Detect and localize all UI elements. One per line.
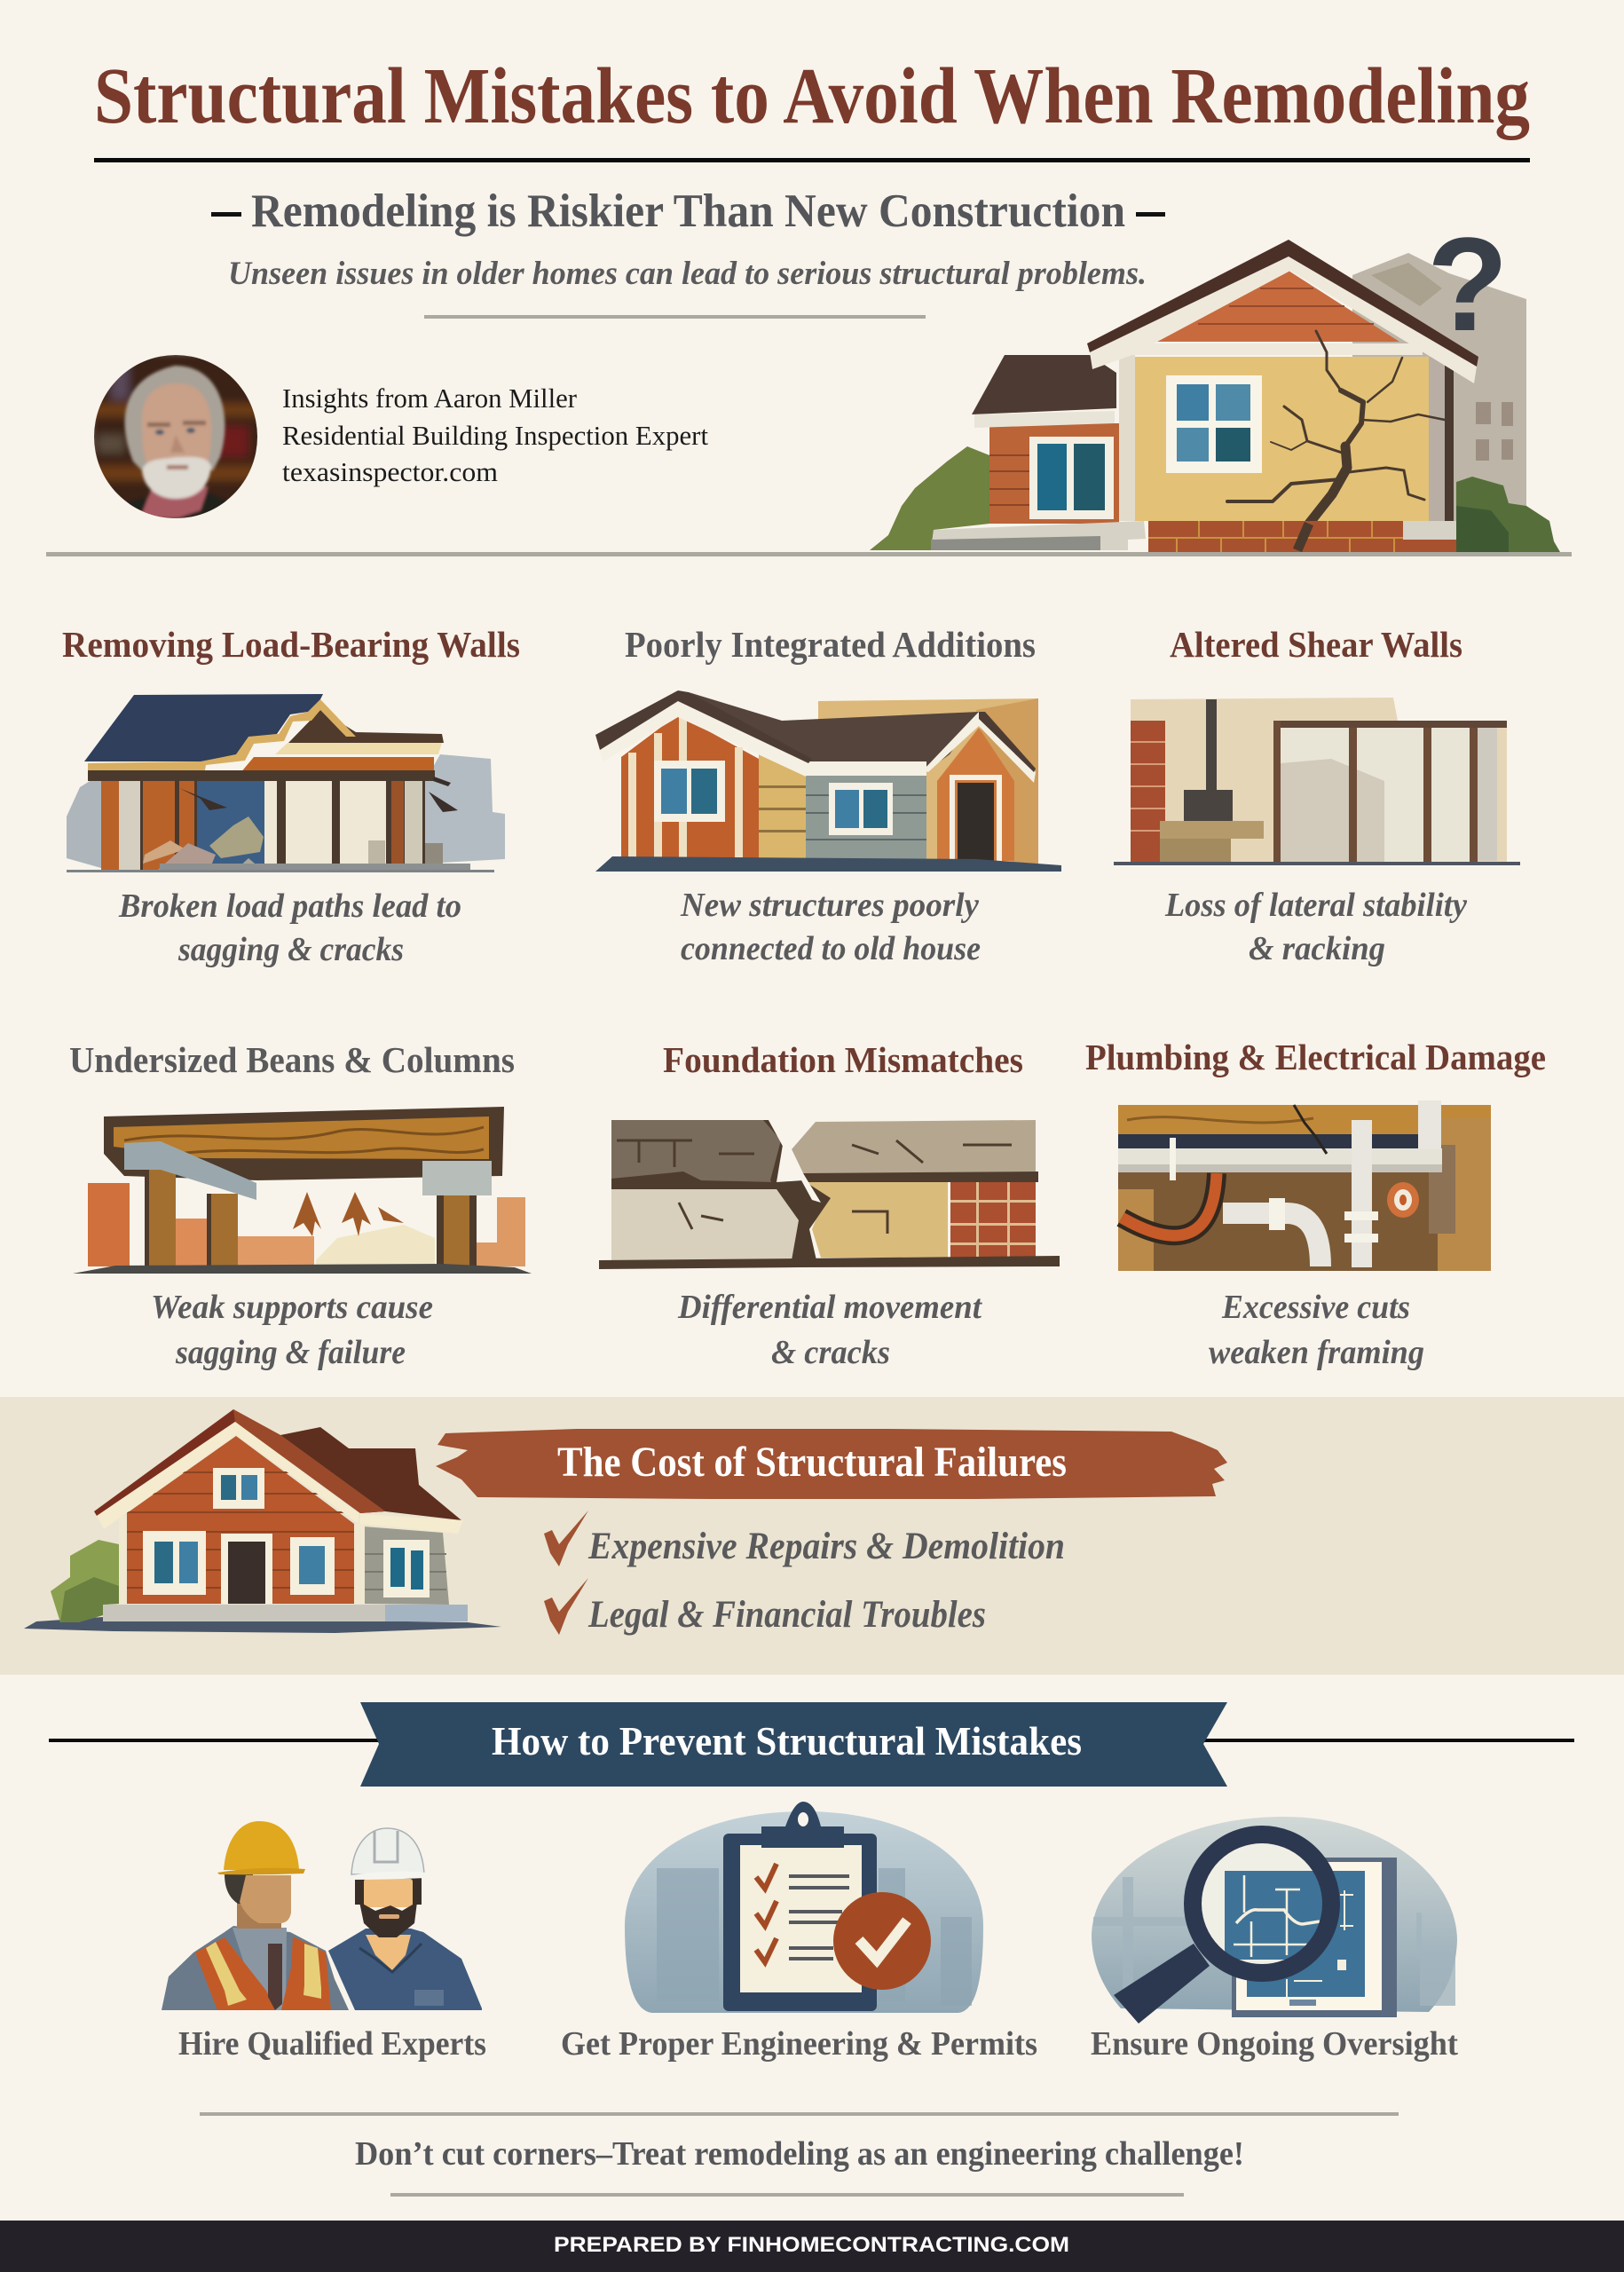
expert credit: Insights from Aaron Miller <box>282 383 578 414</box>
panel: poorly integrated additions <box>595 624 1061 967</box>
caption: Differential movement <box>677 1289 982 1326</box>
icon: two workers <box>162 1821 482 2010</box>
icon: clipboard with checkmark <box>625 1802 983 2013</box>
caption: sagging & failure <box>175 1334 406 1371</box>
caption: weaken framing <box>1209 1334 1424 1371</box>
icon: question mark: ? <box>1427 209 1509 359</box>
caption: connected to old house <box>681 930 981 967</box>
expert credit: Residential Building Inspection Expert <box>282 420 708 451</box>
subtitle: remodeling is riskier: Remodeling is Riskier Than New Construction <box>251 185 1125 237</box>
panel: cost of structural failures <box>0 1397 1624 1675</box>
footer <box>0 2221 1624 2272</box>
panel: foundation mismatches <box>599 1039 1060 1371</box>
caption <box>151 1289 433 1371</box>
closing message: Don’t cut corners–Treat remodeling as an engineering challenge! <box>355 2135 1244 2173</box>
panel: ongoing oversight <box>1091 1817 1458 2063</box>
caption <box>677 1289 982 1371</box>
cost item: expensive repairs: Expensive Repairs & Demolition <box>587 1526 1065 1567</box>
caption <box>1209 1289 1424 1371</box>
hero illustration: cracked house <box>870 209 1560 552</box>
brush banner heading <box>436 1429 1227 1499</box>
caption: & cracks <box>771 1334 890 1371</box>
caption: sagging & cracks <box>177 931 404 968</box>
illustration <box>73 1107 532 1274</box>
banner: how to prevent <box>49 1702 1574 1787</box>
expert credit: texasinspector.com <box>282 456 498 487</box>
heading: Foundation Mismatches <box>663 1039 1023 1080</box>
banner: how to prevent: How to Prevent Structural Mistakes <box>492 1718 1082 1763</box>
illustration <box>595 690 1061 872</box>
heading: Altered Shear Walls <box>1170 624 1462 665</box>
panel: altered shear walls <box>1114 624 1520 967</box>
panel: hire qualified experts <box>162 1821 486 2063</box>
heading: Removing Load-Bearing Walls <box>62 624 520 665</box>
caption: Weak supports cause <box>151 1289 433 1326</box>
brush banner heading: The Cost of Structural Failures <box>557 1439 1067 1486</box>
heading: Poorly Integrated Additions <box>625 624 1036 665</box>
panel: removing load-bearing walls <box>62 624 520 968</box>
caption: New structures poorly <box>680 887 979 924</box>
panel: engineering and permits <box>561 1802 1037 2063</box>
caption: Loss of lateral stability <box>1164 887 1467 924</box>
illustration <box>599 1120 1060 1269</box>
label: Hire Qualified Experts <box>178 2025 486 2063</box>
icon: brick house <box>24 1409 501 1633</box>
closing message <box>200 2112 1399 2197</box>
cost item: expensive repairs <box>544 1511 1065 1567</box>
expert portrait <box>94 355 257 518</box>
expert credit <box>282 383 708 487</box>
illustration <box>1114 698 1520 865</box>
caption: Broken load paths lead to <box>118 888 461 925</box>
heading: Undersized Beans & Columns <box>69 1039 515 1080</box>
panel: plumbing and electrical damage <box>1085 1037 1546 1371</box>
cost item: legal troubles: Legal & Financial Troubles <box>587 1594 986 1636</box>
label: Ensure Ongoing Oversight <box>1091 2025 1458 2063</box>
tagline: Unseen issues in older homes can lead to serious structural problems. <box>228 256 1147 292</box>
footer: PREPARED BY FINHOMECONTRACTING.COM <box>554 2233 1069 2257</box>
caption: Excessive cuts <box>1221 1289 1410 1326</box>
caption <box>118 888 461 968</box>
tagline <box>228 256 1147 319</box>
illustration <box>1118 1100 1491 1271</box>
caption <box>680 887 981 967</box>
cost item: legal troubles <box>544 1578 986 1636</box>
crack <box>1227 331 1445 550</box>
heading: Plumbing & Electrical Damage <box>1085 1037 1546 1077</box>
illustration <box>67 694 505 872</box>
label: Get Proper Engineering & Permits <box>561 2025 1037 2063</box>
panel: undersized beams and columns <box>69 1039 532 1371</box>
caption: & racking <box>1249 930 1385 967</box>
icon: magnifier over blueprint <box>1092 1817 1457 2024</box>
caption <box>1164 887 1467 967</box>
